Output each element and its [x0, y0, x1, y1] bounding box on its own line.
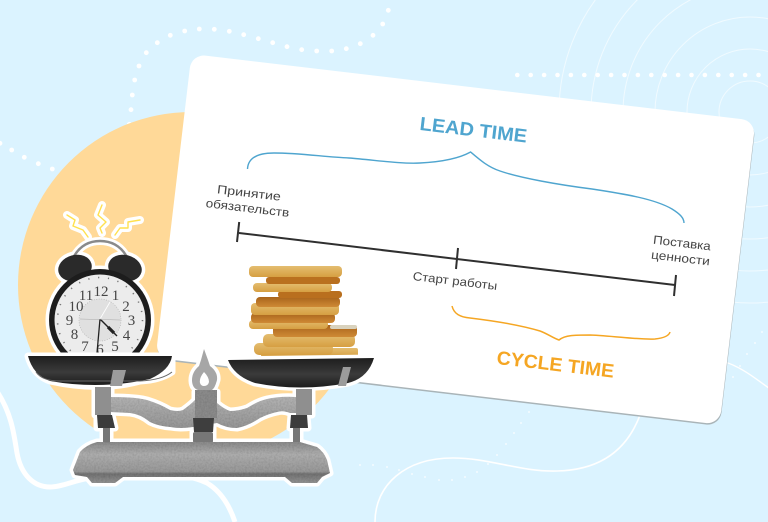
- left pan stem: [95, 387, 115, 442]
- center block: [195, 390, 217, 418]
- label: поставка ценности: Поставка: [652, 233, 712, 253]
- base: [73, 442, 330, 483]
- label: принятие обязательств: [205, 182, 290, 220]
- label: старт работы: Старт работы: [412, 269, 498, 293]
- clock: [49, 241, 151, 371]
- concentric arcs: [559, 0, 768, 303]
- lead time brace: [248, 152, 684, 223]
- right pan clip: [338, 367, 351, 386]
- clock numbers: 12: [94, 284, 108, 300]
- timeline: [237, 222, 676, 296]
- thin white curve right: [722, 361, 768, 389]
- label: принятие обязательств: Принятие: [216, 182, 282, 204]
- clock numbers: 6: [96, 342, 104, 358]
- heading: cycle time: CYCLE TIME: [496, 348, 615, 383]
- left pan rim: [36, 372, 172, 381]
- clock numbers: 1: [112, 288, 119, 304]
- heading: lead time: LEAD TIME: [418, 114, 528, 148]
- orange circle: [18, 112, 364, 458]
- card shadow: [156, 56, 756, 426]
- clock body and face: [49, 269, 151, 352]
- center knob: [193, 432, 213, 443]
- clock numbers: 9: [66, 313, 73, 329]
- right pan stem: [290, 389, 312, 442]
- scale: [28, 349, 374, 483]
- clock numbers: 4: [123, 328, 131, 344]
- coins: [249, 266, 358, 357]
- clock numbers: 5: [111, 339, 119, 355]
- center pointer: [192, 349, 217, 390]
- faint dots lower right: [359, 331, 763, 481]
- label: принятие обязательств: обязательств: [205, 196, 290, 220]
- clock numbers: 8: [71, 327, 78, 343]
- clock numbers: 3: [128, 313, 135, 329]
- thick white curve: [0, 393, 235, 522]
- clock hands: [80, 302, 120, 353]
- lightning sparks: [67, 205, 140, 237]
- right pan: [228, 358, 374, 388]
- clock numbers: 7: [81, 339, 89, 355]
- left pan: [28, 356, 172, 385]
- clock bells: [55, 251, 145, 285]
- label: поставка ценности: [650, 233, 712, 268]
- center dark joint: [193, 418, 214, 432]
- clock numbers: 10: [68, 299, 84, 315]
- beam: [110, 397, 296, 428]
- left pan clip: [110, 370, 126, 386]
- cycle time brace: [452, 306, 670, 340]
- clock numbers: 11: [79, 288, 93, 304]
- panel: white card: [156, 54, 756, 425]
- clock handle: [73, 241, 127, 258]
- clock numbers: [66, 284, 135, 358]
- dotted row top right: [515, 73, 761, 77]
- clock numbers: 2: [122, 299, 130, 315]
- clock white outline: [49, 241, 151, 371]
- dotted curve top left: [0, 8, 391, 171]
- label: поставка ценности: ценности: [650, 248, 711, 268]
- scale white outline: [28, 349, 374, 483]
- thin white curve: [375, 415, 640, 522]
